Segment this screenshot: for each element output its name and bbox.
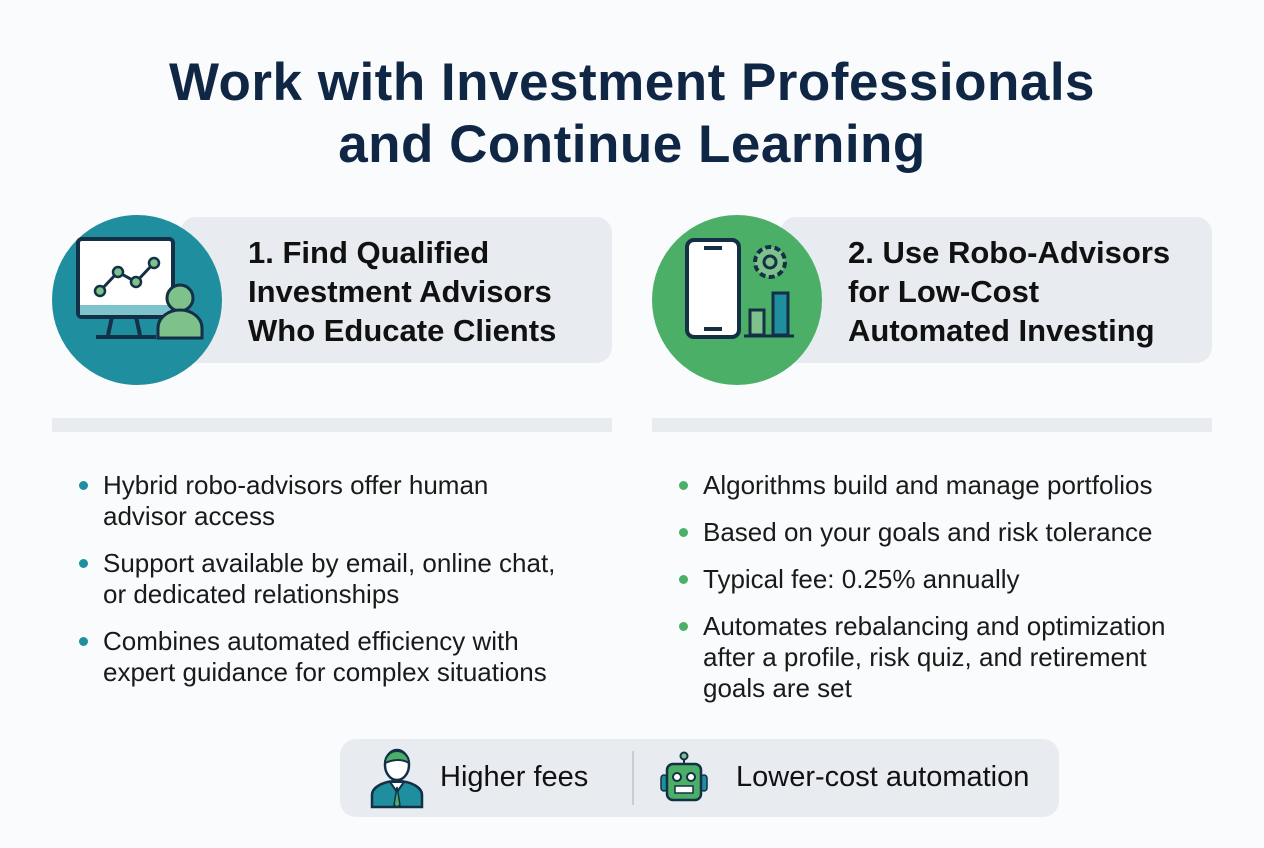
- heading text: Automated Investing: [848, 313, 1155, 348]
- bullet list: robo: [679, 470, 1166, 703]
- bullet list: robo: goals are set: [703, 673, 852, 703]
- heading text: Who Educate Clients: [248, 313, 556, 348]
- bullet list: advisors: Support available by email, online chat,: [103, 548, 555, 578]
- heading text: 2. Use Robo-Advisors: [848, 235, 1170, 270]
- panel header: advisors: [52, 215, 612, 385]
- bullet list: robo: Automates rebalancing and optimization: [703, 611, 1166, 641]
- heading text: [248, 235, 556, 348]
- bullet list: advisors: expert guidance for complex situations: [103, 657, 547, 687]
- label: lower-cost automation: Lower-cost automation: [736, 761, 1029, 793]
- bullet list: advisors: [79, 470, 555, 687]
- bullet list: robo: after a profile, risk quiz, and retirement: [703, 642, 1147, 672]
- icon: robot: [660, 752, 708, 802]
- label: higher fees: Higher fees: [440, 761, 588, 793]
- heading text: for Low-Cost: [848, 274, 1039, 309]
- bullet list: robo: Based on your goals and risk tolerance: [703, 517, 1152, 547]
- icon: phone, gear, bars: [652, 215, 822, 385]
- comparison bar: [340, 739, 1059, 817]
- title: [169, 53, 1095, 174]
- bullet list: robo: Typical fee: 0.25% annually: [703, 564, 1020, 594]
- panel header: robo-advisors: [652, 215, 1212, 385]
- title: and Continue Learning: [338, 115, 926, 174]
- bullet list: advisors: or dedicated relationships: [103, 579, 399, 609]
- heading text: 1. Find Qualified: [248, 235, 489, 270]
- icon: advisor person: [370, 748, 424, 808]
- heading text: [848, 235, 1170, 348]
- bullet list: advisors: Combines automated efficiency with: [103, 626, 519, 656]
- bullet list: robo: Algorithms build and manage portfolios: [703, 470, 1152, 500]
- heading text: Investment Advisors: [248, 274, 552, 309]
- icon: monitor with advisor: [52, 215, 222, 385]
- title: Work with Investment Professionals: [169, 53, 1095, 112]
- bullet list: advisors: Hybrid robo-advisors offer human: [103, 470, 488, 500]
- bullet list: advisors: advisor access: [103, 501, 275, 531]
